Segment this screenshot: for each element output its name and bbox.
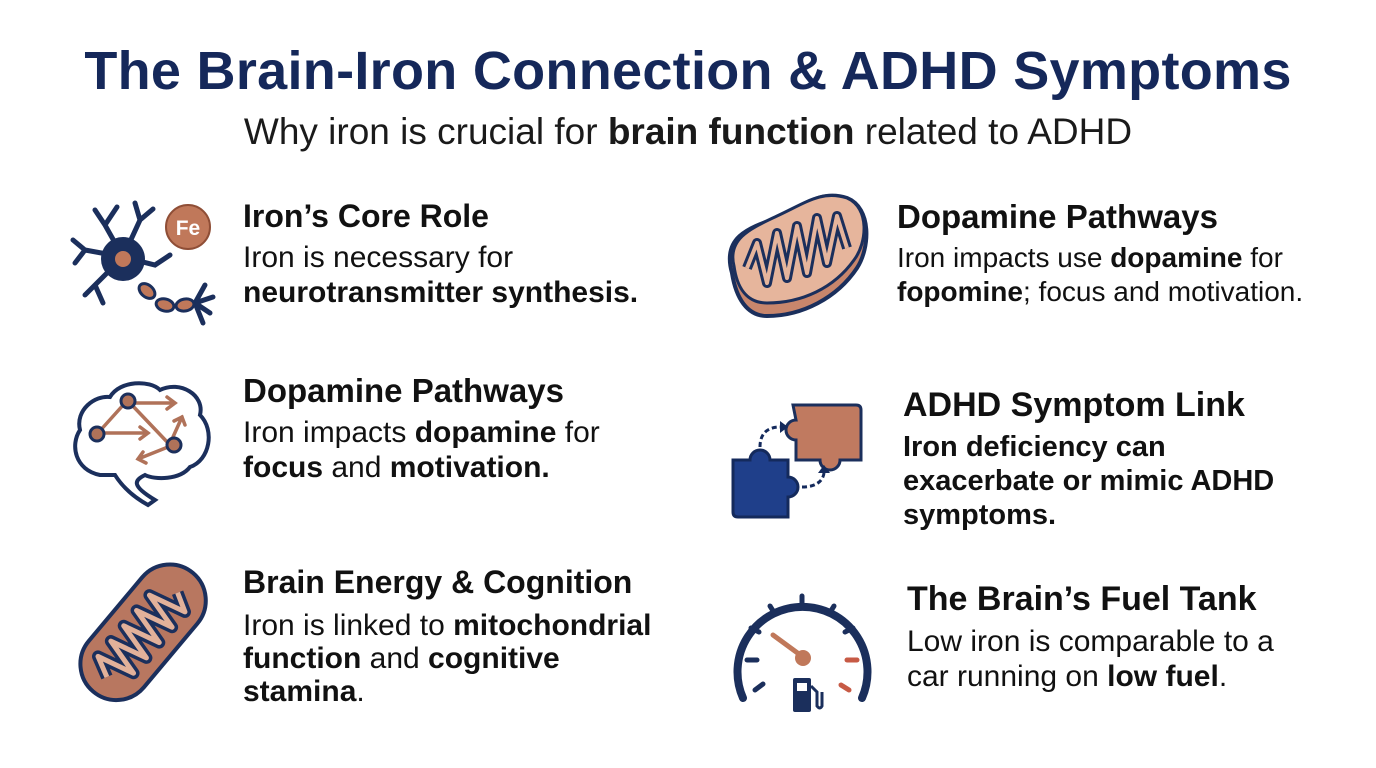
panel: ADHD symptom link: exacerbate or mimic ADHD [903, 465, 1274, 497]
panel: iron's core role: neurotransmitter synthesis. [243, 276, 638, 309]
icon: fuel gauge [734, 594, 872, 712]
panel: dopamine pathways right: Iron impacts use dopamine for [897, 242, 1283, 273]
panel: dopamine pathways left: focus and motivation. [243, 451, 550, 484]
icon: brain network [73, 381, 211, 508]
panel: ADHD symptom link: Iron deficiency can [903, 431, 1166, 463]
icon: neuron with Fe [70, 200, 216, 326]
icon: neuron with Fe: Fe [176, 217, 200, 240]
panel: iron's core role [243, 198, 638, 309]
panel: dopamine pathways right [897, 198, 1303, 307]
panel: brain energy: stamina. [243, 675, 365, 708]
panel: dopamine pathways left [243, 372, 600, 484]
panel: brain energy: function and cognitive [243, 642, 560, 675]
panel: ADHD symptom link [903, 386, 1274, 531]
panel: brain's fuel tank: Low iron is comparable to a [907, 625, 1274, 658]
icon: mitochondrion left [78, 562, 208, 702]
panel: dopamine pathways left: Dopamine Pathways [243, 372, 564, 409]
panel: brain's fuel tank: car running on low fuel. [907, 660, 1227, 693]
panel: ADHD symptom link: ADHD Symptom Link [903, 386, 1245, 424]
panel: dopamine pathways right: Dopamine Pathways [897, 198, 1218, 235]
panel: ADHD symptom link: symptoms. [903, 499, 1056, 531]
title: The Brain-Iron Connection & ADHD Symptoms [84, 41, 1292, 101]
panel: brain energy [243, 564, 651, 708]
icon: puzzle pieces [732, 404, 862, 518]
panel: dopamine pathways right: fopomine; focus and motivation. [897, 276, 1303, 307]
panel: brain's fuel tank: The Brain’s Fuel Tank [907, 580, 1257, 618]
panel: dopamine pathways left: Iron impacts dopamine for [243, 416, 600, 449]
panel: brain energy: Iron is linked to mitochondrial [243, 609, 651, 642]
panel: brain energy: Brain Energy & Cognition [243, 564, 632, 600]
panel: iron's core role: Iron’s Core Role [243, 198, 489, 234]
panel: brain's fuel tank [907, 580, 1274, 693]
subtitle: Why iron is crucial for brain function related to ADHD [244, 111, 1132, 152]
panel: iron's core role: Iron is necessary for [243, 241, 513, 274]
icon: mitochondrion right [728, 194, 868, 318]
